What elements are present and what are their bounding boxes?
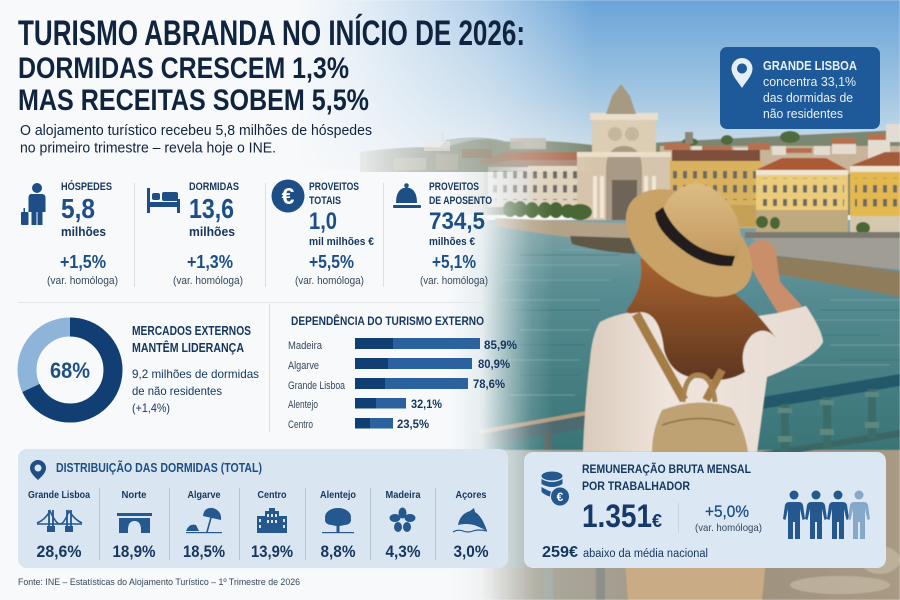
icon: suspension bridge (37, 510, 82, 532)
kpi: proveitos de aposento: +5,1% (432, 252, 476, 272)
kpi: proveitos totais (272, 180, 374, 287)
yellow building three (850, 152, 900, 237)
text: mercados externos: MERCADOS EXTERNOS (132, 324, 251, 338)
donut chart: 68% foreign markets (27, 327, 113, 413)
panel: remuneração: 1.351 (582, 498, 652, 534)
kpi: proveitos de aposento: DE APOSENTO (429, 195, 492, 207)
woman: forearm (745, 242, 802, 316)
callout: Grande Lisboa: GRANDE LISBOA (763, 59, 857, 73)
callout: Grande Lisboa: concentra 33,1% (763, 75, 856, 89)
woman: backpack (652, 402, 748, 452)
panel: remuneração: (var. homóloga) (695, 522, 762, 534)
kpi: proveitos totais: PROVEITOS (309, 181, 359, 193)
kpi: hóspedes: milhões (61, 224, 106, 239)
bar: Grande Lisboa: Grande Lisboa (288, 380, 346, 392)
title: MAS RECEITAS SOBEM 5,5% (18, 84, 369, 117)
heading: DISTRIBUIÇÃO DAS DORMIDAS (TOTAL) (56, 460, 262, 475)
kpi: dormidas: (var. homóloga) (173, 275, 243, 287)
kpi: proveitos totais: +5,5% (309, 252, 354, 272)
icon: stone bridge (117, 513, 152, 533)
hilltop trees (682, 131, 800, 146)
kpi: hóspedes: +1,5% (60, 252, 106, 272)
background town (480, 124, 900, 174)
faded skyline at left of photo (365, 132, 530, 172)
panel: remuneração: 259€ (542, 544, 578, 561)
woman: hair (626, 258, 776, 380)
kpi: proveitos totais: TOTAIS (309, 195, 341, 207)
kpi: dormidas: DORMIDAS (189, 181, 239, 193)
icon: euro badge: € (282, 183, 295, 209)
donut chart: 68% foreign markets: 68% (50, 358, 90, 383)
region: Alentejo: 8,8% (320, 542, 356, 561)
bar: Grande Lisboa (288, 377, 505, 392)
title (18, 13, 525, 117)
kpi: dormidas: +1,3% (187, 252, 233, 272)
region: Centro: 13,9% (251, 542, 293, 561)
title: DORMIDAS CRESCEM 1,3% (18, 52, 349, 85)
kpi: proveitos totais: mil milhões € (309, 236, 374, 248)
region: Algarve: 18,5% (183, 542, 225, 561)
callout: Grande Lisboa (720, 47, 880, 129)
kpi: proveitos totais: 1,0 (309, 208, 337, 235)
kpi: proveitos de aposento: 734,5 (429, 208, 485, 235)
icon: beach umbrella (186, 508, 222, 533)
pavement (440, 450, 900, 600)
riverside trees (503, 201, 870, 234)
region: Centro: Centro (258, 489, 286, 501)
region: Alentejo (320, 489, 356, 561)
icon: dolphin (453, 508, 487, 532)
icon: bed (147, 188, 180, 213)
woman: backpack straps (636, 314, 722, 400)
callout: Grande Lisboa: das dormidas de (763, 91, 853, 105)
text: mercados externos: 9,2 milhões de dormidas (132, 367, 259, 381)
panel: key figures (21, 180, 492, 287)
railing right (762, 374, 900, 458)
subtitle: no primeiro trimestre – revela hoje o INE. (20, 140, 276, 156)
woman: shorts (625, 560, 766, 600)
region: Norte (112, 489, 156, 561)
bar: Alentejo: 32,1% (411, 397, 442, 411)
icon: white location pin (732, 58, 752, 88)
region: Madeira: 4,3% (386, 542, 420, 561)
text: mercados externos: (+1,4%) (132, 401, 170, 415)
subtitle (20, 122, 372, 156)
bar chart: dependência do turismo externo: DEPENDÊNCIA DO TURISMO EXTERNO (291, 313, 484, 328)
bar: Madeira: 85,9% (484, 338, 517, 352)
icon: cork tree (322, 508, 354, 533)
region: Algarve (183, 489, 225, 561)
title: TURISMO ABRANDA NO INÍCIO DE 2026: (18, 13, 525, 53)
kpi: dormidas: milhões (189, 224, 235, 239)
water ripples (500, 250, 900, 395)
icon: four workers, one lighter (783, 490, 870, 539)
sky (0, 0, 900, 170)
kpi: dormidas: 13,6 (189, 193, 234, 224)
region: Norte: Norte (122, 489, 147, 501)
woman: hat crown (658, 183, 741, 260)
region: Norte: 18,9% (112, 542, 156, 561)
triumphal arch (577, 84, 671, 220)
icon: location pin (30, 460, 46, 480)
region: Algarve: Algarve (188, 489, 221, 501)
left wing building (488, 160, 578, 208)
icon: flower (390, 508, 416, 532)
yellow building two (756, 158, 848, 232)
kpi: hóspedes: HÓSPEDES (61, 180, 112, 193)
quay and shore (495, 218, 900, 297)
woman: hand (750, 240, 774, 264)
kpi: proveitos de aposento: PROVEITOS (429, 181, 479, 193)
kpi: proveitos de aposento: milhões € (429, 236, 475, 248)
woman: hat brim (606, 167, 772, 319)
region: Madeira (386, 489, 421, 561)
kpi: hóspedes (21, 180, 118, 287)
panel: distribuição das dormidas (18, 449, 508, 568)
callout: Grande Lisboa: não residentes (763, 107, 843, 121)
water (360, 220, 900, 455)
veil over content area (0, 172, 560, 600)
text: mercados externos: MANTÊM LIDERANÇA (132, 340, 244, 355)
panel: remuneração: POR TRABALHADOR (582, 479, 690, 493)
panel: remuneração (524, 452, 886, 568)
region: Açores: Açores (456, 489, 487, 501)
bar: Alentejo: Alentejo (288, 399, 318, 411)
panel: remuneração: € (652, 511, 662, 531)
subtitle: O alojamento turístico recebeu 5,8 milhões de hóspedes (20, 122, 372, 139)
bar: Grande Lisboa: 78,6% (473, 377, 505, 391)
veil over sky and skyline (0, 0, 600, 172)
region: Açores: 3,0% (454, 542, 488, 561)
bar: Algarve (288, 357, 510, 372)
text: mercados externos: de não residentes (132, 384, 222, 398)
yellow building one (670, 150, 762, 228)
region: Grande Lisboa (28, 489, 90, 561)
icon: university building (257, 508, 287, 533)
kpi: hóspedes: 5,8 (61, 193, 95, 224)
icon: coin stack with euro: € (557, 490, 564, 504)
region: Grande Lisboa: Grande Lisboa (28, 489, 90, 501)
bar: Centro (288, 417, 429, 431)
bar: Alentejo (288, 397, 442, 411)
woman: backpack handle (683, 375, 715, 402)
icon: traveller with suitcase (21, 183, 46, 225)
distant hills (360, 130, 900, 215)
region: Madeira: Madeira (386, 489, 421, 501)
panel: remuneração: abaixo da média nacional (583, 548, 708, 560)
kpi: hóspedes: (var. homóloga) (47, 275, 118, 287)
icon: coin stack with euro (542, 472, 570, 506)
region: Açores (453, 489, 488, 561)
railing left (480, 411, 605, 600)
text: mercados externos (132, 324, 259, 415)
kpi: dormidas (147, 181, 243, 287)
bar chart: dependência do turismo externo (288, 313, 517, 431)
kpi: proveitos totais: (var. homóloga) (295, 275, 364, 287)
bar: Centro: 23,5% (397, 417, 429, 431)
region: Alentejo: Alentejo (320, 489, 356, 501)
woman: shirt (583, 306, 823, 452)
bar: Centro: Centro (288, 419, 313, 431)
kpi: proveitos de aposento (393, 181, 492, 287)
kpi: proveitos de aposento: (var. homóloga) (420, 275, 488, 287)
woman: hat band (655, 207, 735, 266)
panel: remuneração: +5,0% (705, 502, 749, 521)
region: Grande Lisboa: 28,6% (36, 542, 82, 561)
region: Centro (251, 489, 293, 561)
bar: Algarve: 80,9% (478, 357, 510, 371)
source note: Fonte: INE – Estatísticas do Alojamento Turístico – 1º Trimestre de 2026 (18, 577, 300, 588)
icon: service bell (393, 183, 421, 208)
panel: remuneração: REMUNERAÇÃO BRUTA MENSAL (582, 461, 751, 476)
bar: Madeira (288, 338, 517, 352)
bar: Madeira: Madeira (288, 340, 323, 352)
bar: Algarve: Algarve (288, 360, 319, 372)
